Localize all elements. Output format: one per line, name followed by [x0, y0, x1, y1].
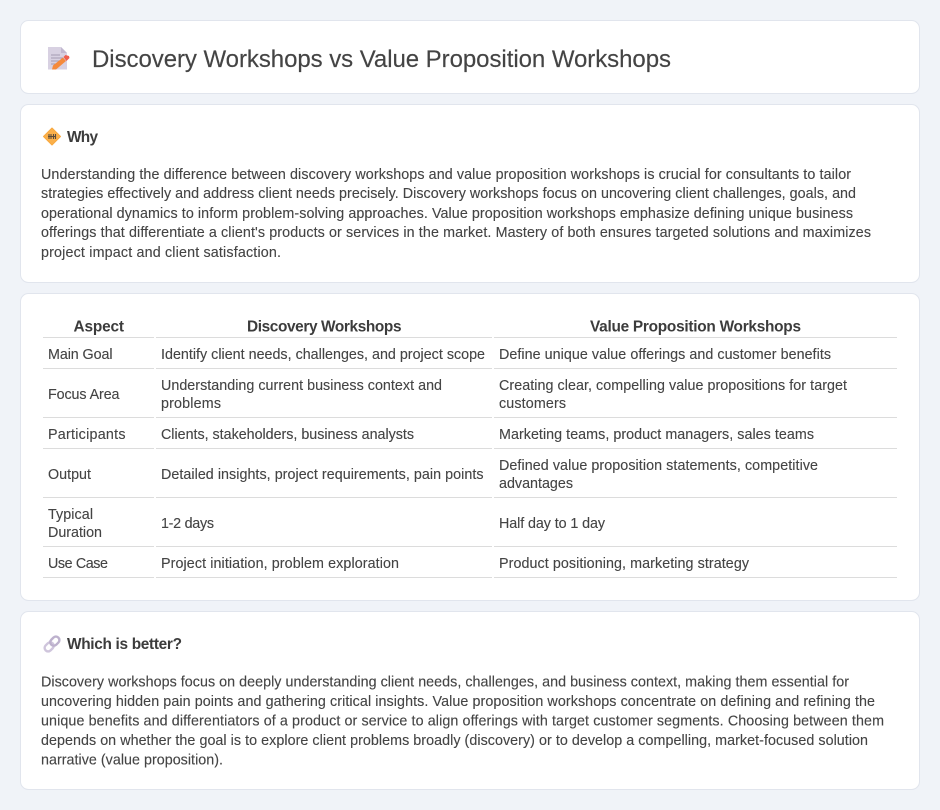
table row: output: Defined value proposition statements, competitive — [499, 458, 818, 474]
table row: participants — [43, 427, 897, 449]
text block: why — [41, 167, 871, 261]
text block: which is better: unique benefits and differentiators of a product or service to align offerings with target customer segments. Choosing between them — [41, 714, 884, 730]
table row: focus area: problems — [161, 396, 221, 412]
table row: typical duration: Half day to 1 day — [499, 516, 606, 532]
table row: focus area: customers — [499, 396, 566, 412]
table row: typical duration — [43, 507, 897, 547]
icon: diamond sign — [44, 128, 60, 145]
table row: output — [43, 458, 897, 498]
icon: link — [43, 635, 61, 653]
text block: which is better — [41, 674, 884, 768]
table row: main goal: Define unique value offerings and customer benefits — [499, 347, 831, 363]
heading: which is better: Which is better? — [67, 636, 182, 653]
title: Discovery Workshops vs Value Proposition Workshops — [92, 46, 671, 73]
table header row: Discovery Workshops — [247, 318, 402, 336]
table row: focus area — [43, 378, 897, 418]
text block: which is better: depends on whether the goal is to explore client problems broadly (discovery) or to develop a compelling, market-focused solution — [41, 733, 868, 749]
table row: focus area: Creating clear, compelling value propositions for target — [499, 378, 847, 394]
table row: use case: Use Case — [48, 556, 108, 572]
text block: why: project impact and client satisfaction. — [41, 245, 281, 261]
panel: which is better — [20, 612, 920, 790]
table row: main goal: Main Goal — [48, 347, 112, 363]
table row: use case: Project initiation, problem exploration — [161, 556, 399, 572]
panel: why — [20, 104, 920, 282]
table row: use case: Product positioning, marketing strategy — [499, 556, 750, 572]
panel: header — [20, 20, 920, 94]
text block: why: operational dynamics to inform problem-solving approaches. Value proposition workshops emphasize defining unique business — [41, 206, 853, 222]
table row: focus area: Focus Area — [48, 387, 120, 403]
table header row — [43, 318, 897, 338]
text block: why: Understanding the difference between discovery workshops and value proposition workshops is crucial for consultants to tailor — [41, 167, 851, 183]
table header row: Aspect — [74, 318, 124, 336]
heading: why: Why — [67, 129, 98, 146]
table row: typical duration: Duration — [48, 525, 102, 541]
table header row: Value Proposition Workshops — [590, 318, 801, 336]
table row: output: Detailed insights, project requirements, pain points — [161, 467, 484, 483]
table row: typical duration: Typical — [48, 507, 93, 523]
text block: why: offerings that differentiate a client's products or services in the market. Mastery of both ensures targeted solutions and maximizes — [41, 225, 871, 241]
table row: output: advantages — [499, 476, 573, 492]
table row: output: Output — [48, 467, 91, 483]
table row: main goal: Identify client needs, challenges, and project scope — [161, 347, 485, 363]
panel: comparison table — [20, 294, 920, 600]
text block: which is better: narrative (value proposition). — [41, 752, 223, 768]
text block: which is better: Discovery workshops focus on deeply understanding client needs, challenges, and business context, making them essential for — [41, 674, 849, 690]
table row: typical duration: 1-2 days — [161, 516, 214, 532]
table row: participants: Clients, stakeholders, business analysts — [161, 427, 414, 443]
table row: focus area: Understanding current business context and — [161, 378, 442, 394]
table row: participants: Marketing teams, product managers, sales teams — [499, 427, 814, 443]
text block: which is better: uncovering hidden pain points and gathering critical insights. Value proposition workshops concentrate on defining and refining the — [41, 694, 875, 710]
table row: participants: Participants — [48, 427, 126, 443]
icon: document with pencil — [48, 47, 70, 70]
table row: use case — [43, 556, 897, 578]
table row: main goal — [43, 347, 897, 369]
text block: why: strategies effectively and address client needs precisely. Discovery workshops focus on uncovering client challenges, goals, and — [41, 186, 856, 202]
